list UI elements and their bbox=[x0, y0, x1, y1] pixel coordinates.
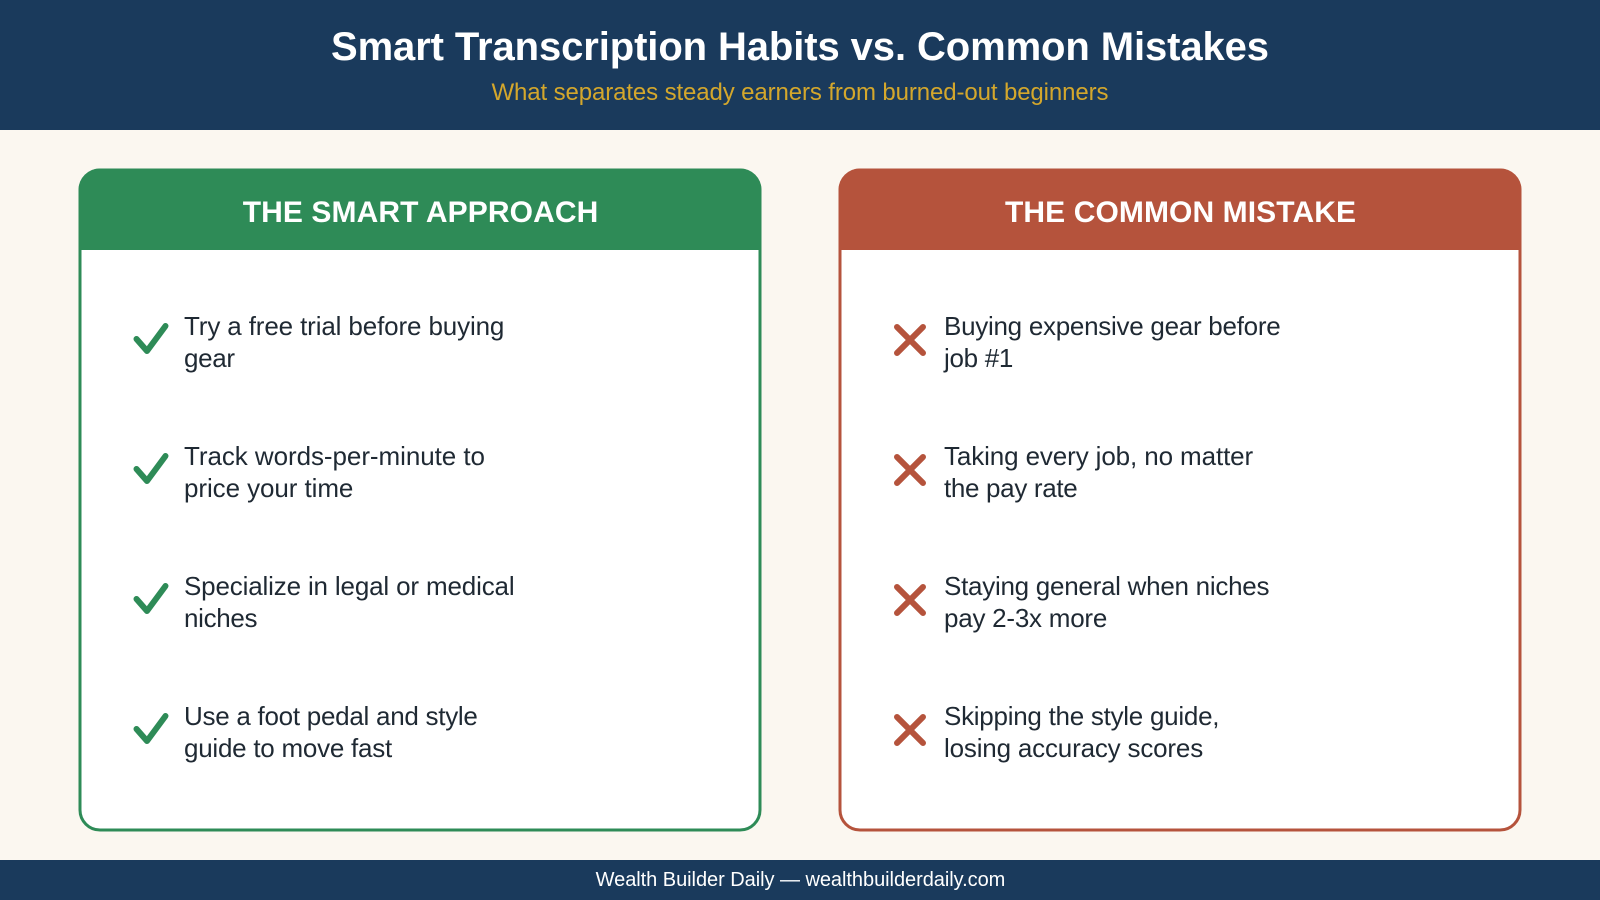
item: every job: Taking every job, no matter bbox=[944, 441, 1254, 471]
header band bbox=[0, 0, 1600, 130]
item: specialize: Specialize in legal or medical bbox=[184, 571, 515, 601]
item: specialize: niches bbox=[184, 603, 258, 633]
panel heading: common mistake: THE COMMON MISTAKE bbox=[1005, 196, 1356, 229]
item: staying general bbox=[897, 571, 1270, 633]
panel heading: common mistake bbox=[838, 168, 1522, 250]
item: track wpm bbox=[136, 441, 485, 503]
panel: the common mistake bbox=[838, 168, 1522, 830]
item: expensive gear: job #1 bbox=[943, 343, 1013, 373]
item: track wpm: price your time bbox=[184, 473, 353, 503]
panel heading: smart approach bbox=[78, 168, 762, 250]
footer band bbox=[0, 860, 1600, 900]
panel heading: smart approach: THE SMART APPROACH bbox=[243, 196, 598, 229]
title: Smart Transcription Habits vs. Common Mistakes bbox=[331, 25, 1269, 69]
item: track wpm: Track words-per-minute to bbox=[184, 441, 485, 471]
item: free trial bbox=[136, 311, 504, 373]
item: style guide bbox=[897, 701, 1220, 763]
item: expensive gear bbox=[897, 311, 1281, 373]
item: staying general: pay 2-3x more bbox=[944, 603, 1107, 633]
item: style guide: losing accuracy scores bbox=[944, 733, 1203, 763]
item: expensive gear: Buying expensive gear before bbox=[944, 311, 1281, 341]
item: staying general: Staying general when niches bbox=[944, 571, 1270, 601]
item: every job: the pay rate bbox=[944, 473, 1078, 503]
item: every job bbox=[897, 441, 1254, 503]
subtitle: What separates steady earners from burned-out beginners bbox=[492, 79, 1108, 106]
item: foot pedal bbox=[136, 701, 478, 763]
item: foot pedal: guide to move fast bbox=[184, 733, 393, 763]
item: foot pedal: Use a foot pedal and style bbox=[184, 701, 478, 731]
panel: the smart approach bbox=[78, 168, 762, 830]
item: style guide: Skipping the style guide, bbox=[944, 701, 1220, 731]
item: free trial: gear bbox=[184, 343, 235, 373]
item: specialize bbox=[136, 571, 515, 633]
item: free trial: Try a free trial before buying bbox=[184, 311, 504, 341]
footer band: Wealth Builder Daily — wealthbuilderdaily.com bbox=[596, 869, 1005, 891]
